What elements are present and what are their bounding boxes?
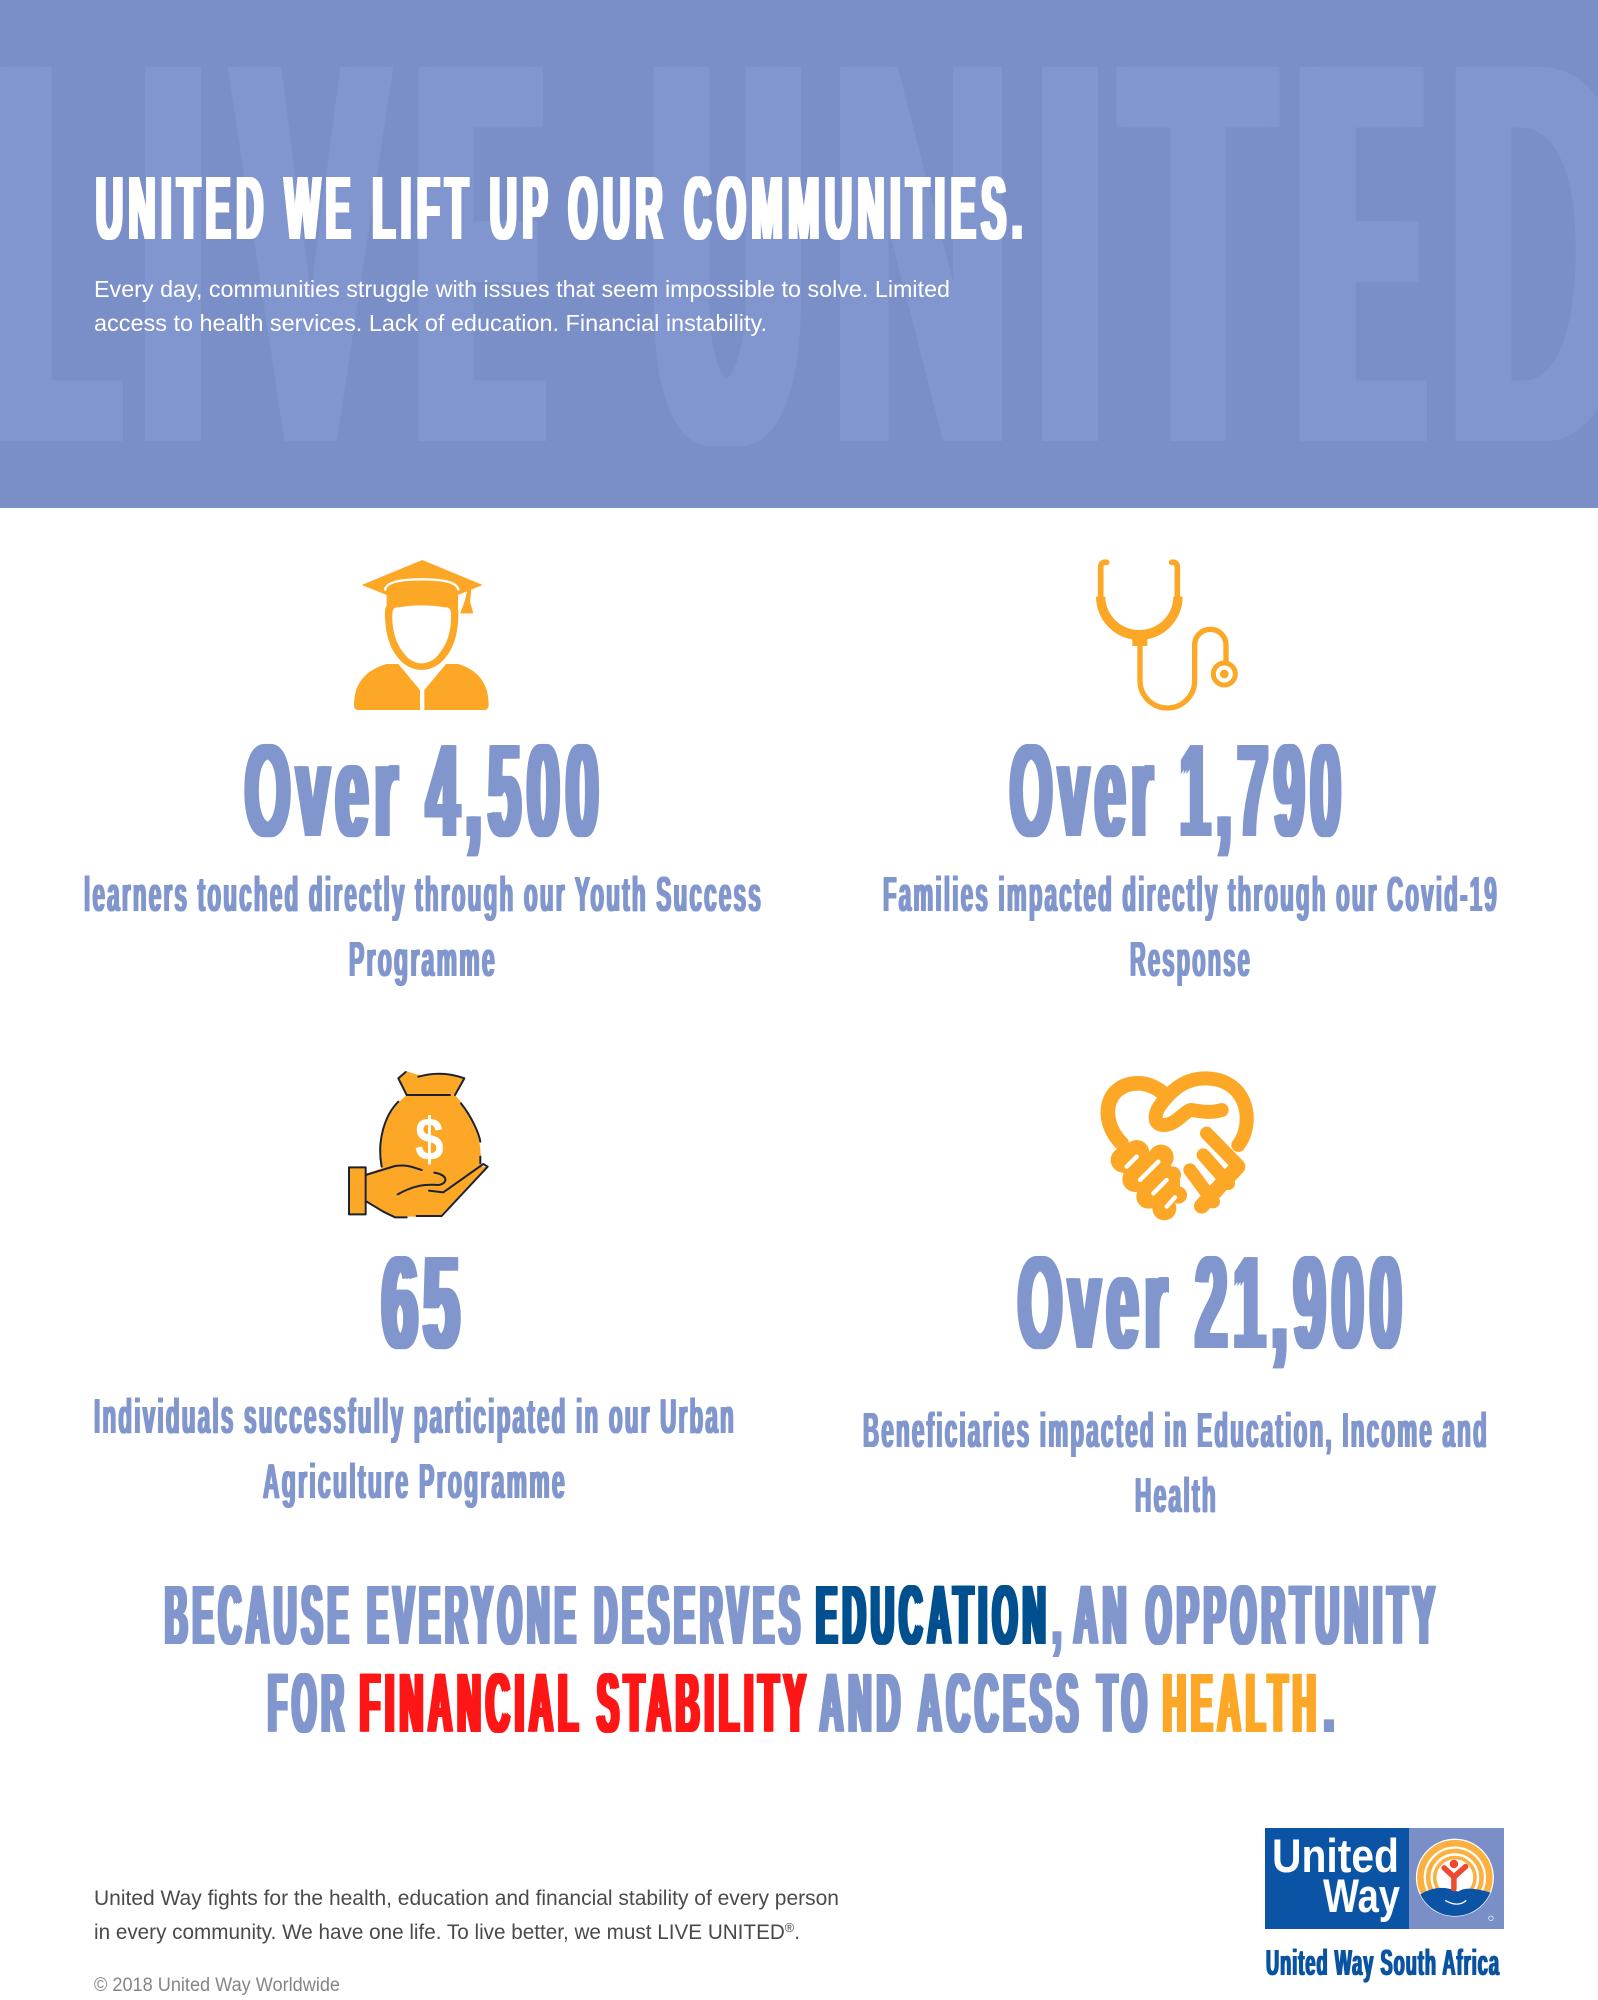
icon: stethoscope: [1096, 562, 1235, 708]
closing statement: ,: [1049, 1568, 1063, 1662]
icon: graduate: [354, 560, 489, 710]
footer text: [94, 1887, 839, 1996]
footer text: in every community. We have one life. To live better, we must LIVE UNITED: [94, 1921, 795, 1944]
intro text: [94, 276, 950, 336]
panel: income stat: 65: [382, 1229, 465, 1376]
closing statement: HEALTH: [1163, 1656, 1321, 1750]
icon: money bag in hand: [349, 1071, 488, 1217]
stat description: Response: [1130, 933, 1252, 987]
text: learners touched directly through our Youth Success: [84, 868, 763, 922]
text: Individuals successfully participated in our Urban: [94, 1390, 736, 1444]
icon: money bag in hand: $: [415, 1106, 444, 1173]
footer text: ®: [785, 1920, 795, 1935]
logo: United Way: [1265, 1828, 1504, 1983]
intro text: Every day, communities struggle with issues that seem impossible to solve. Limited: [94, 276, 950, 302]
closing statement: .: [1320, 1656, 1336, 1750]
footer text: .: [794, 1921, 800, 1944]
closing statement: [165, 1568, 1440, 1750]
stat description: [94, 1390, 736, 1509]
panel: header banner: [0, 0, 1598, 557]
icon: handshake heart: [1108, 1078, 1247, 1220]
logo: United Way: United: [1272, 1829, 1399, 1882]
footer text: United Way fights for the health, education and financial stability of every person: [94, 1887, 839, 1910]
closing statement: EDUCATION: [816, 1568, 1051, 1662]
closing statement: FINANCIAL STABILITY: [360, 1656, 811, 1750]
closing statement: FOR: [268, 1656, 349, 1750]
logo emblem: [1416, 1839, 1494, 1921]
watermark: LIVE UNITED: [0, 0, 1598, 557]
panel: health stat: [883, 562, 1499, 987]
stat description: Programme: [349, 933, 497, 987]
panel: beneficiaries stat: [863, 1078, 1489, 1523]
panel: education stat: Over 4,500: [245, 717, 605, 864]
panel: income stat: [94, 1071, 736, 1509]
logo: United Way: Way: [1323, 1869, 1400, 1922]
stat description: [84, 868, 763, 987]
stat description: [883, 868, 1499, 987]
stat description: Health: [1135, 1469, 1218, 1523]
stat description: [863, 1404, 1489, 1523]
panel: education stat: [84, 560, 763, 987]
stat description: Agriculture Programme: [263, 1455, 567, 1509]
intro text: access to health services. Lack of education. Financial instability.: [94, 310, 767, 336]
footer text: © 2018 United Way Worldwide: [94, 1975, 340, 1996]
